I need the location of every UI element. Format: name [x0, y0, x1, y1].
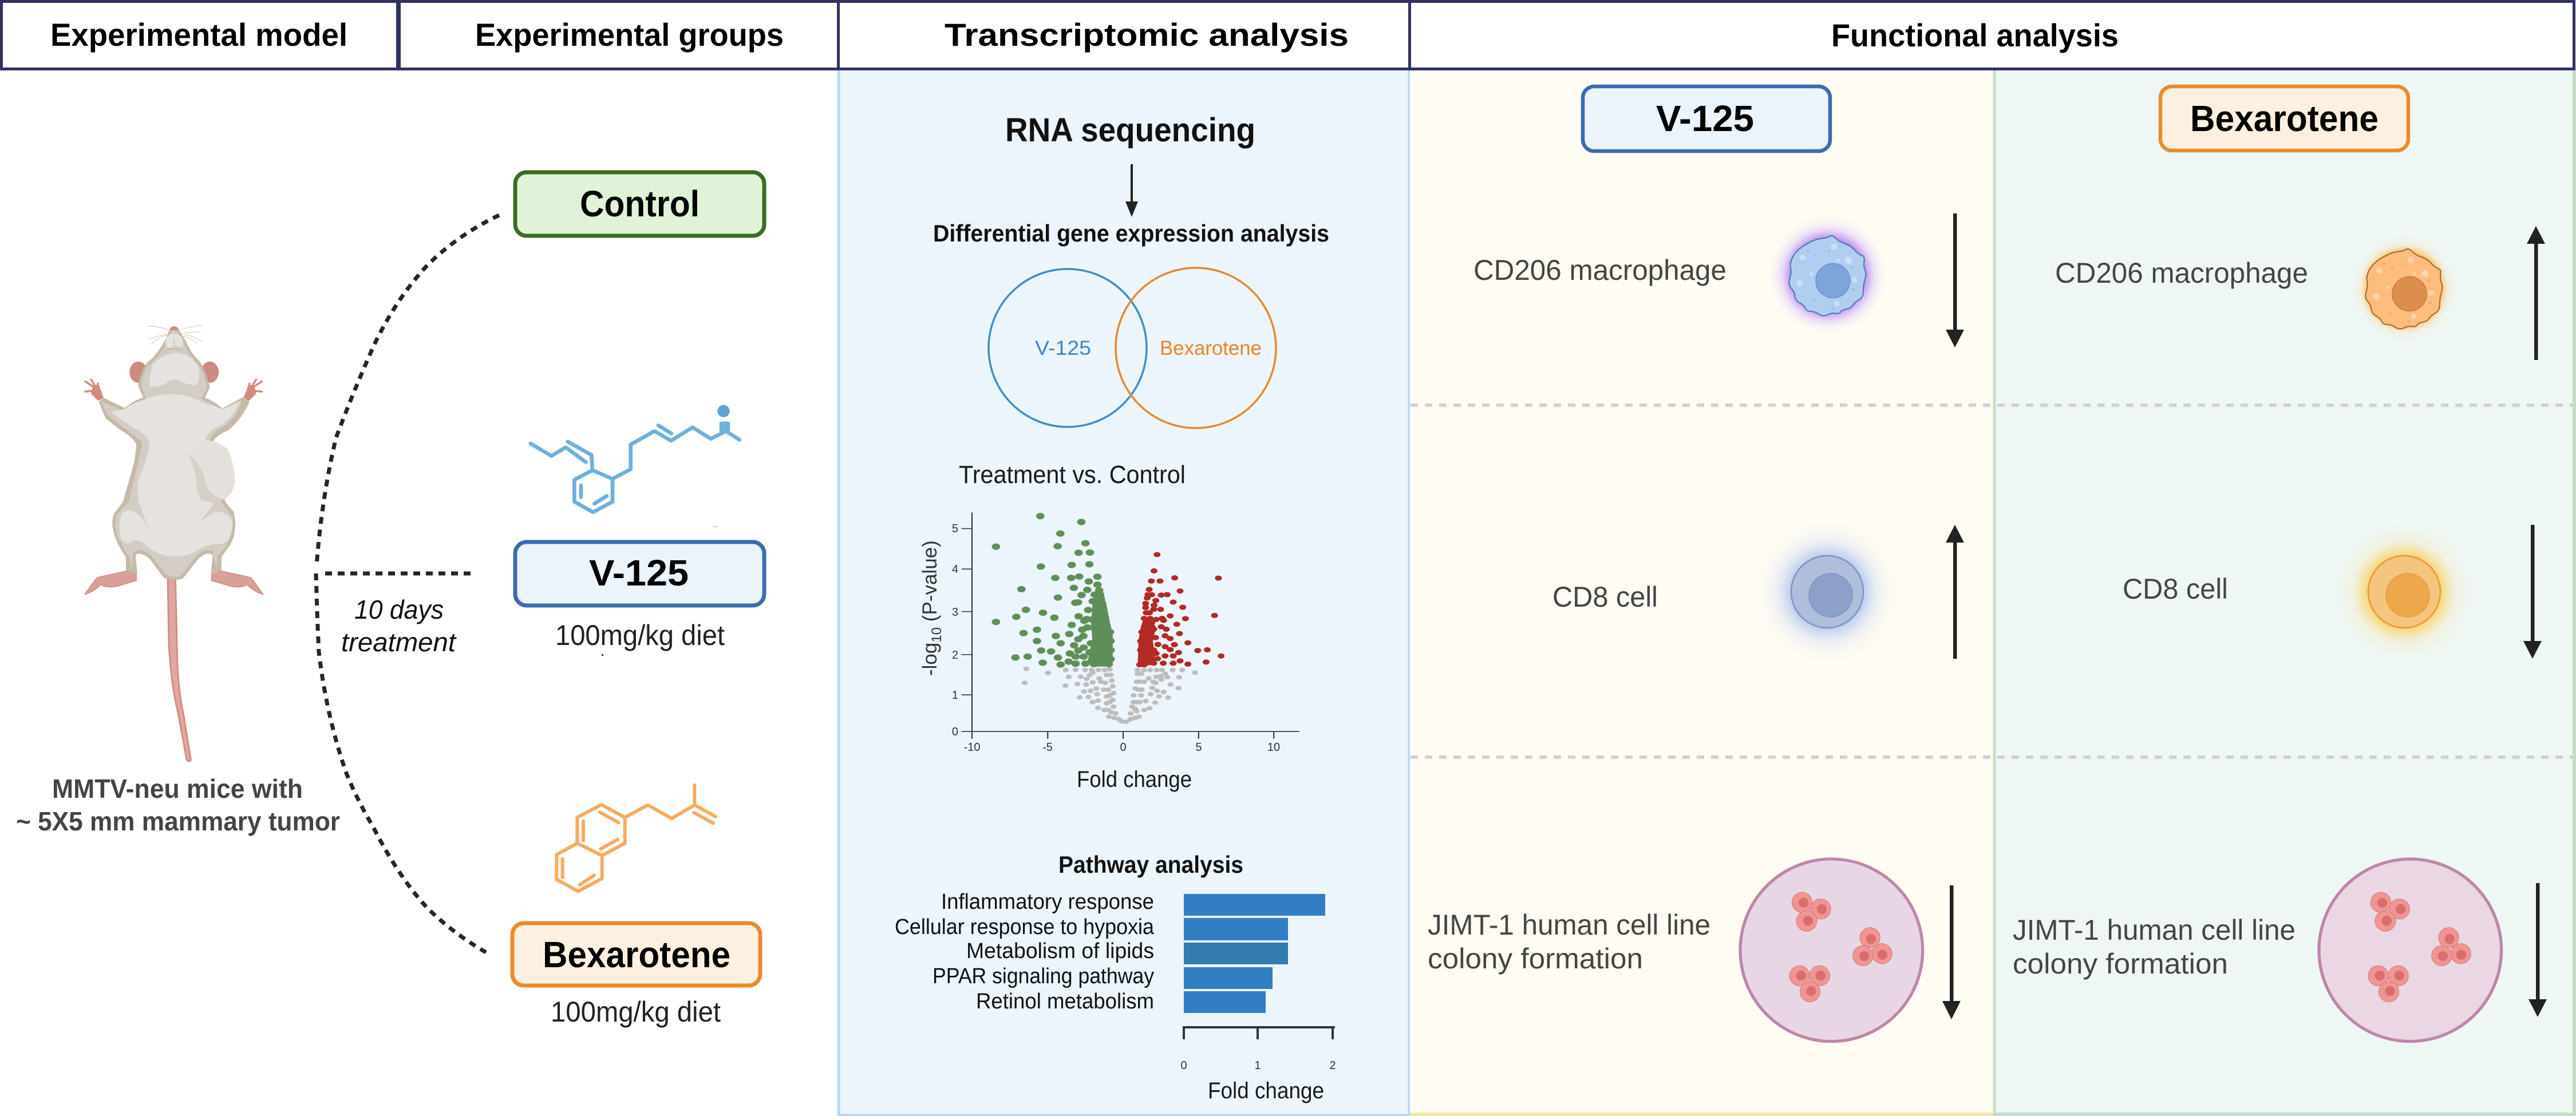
badge: V-125: V-125 — [1656, 98, 1754, 139]
header: experimental model — [1, 1, 397, 69]
arrow: up — [2527, 226, 2545, 360]
label: CD206 macrophage: CD206 macrophage — [1473, 254, 1726, 286]
badge: V-125 — [1583, 86, 1830, 151]
volcano plot: 3 — [952, 606, 958, 619]
label: JIMT-1 colony formation — [1428, 909, 1710, 975]
pathway bar chart: Metabolism of lipids — [966, 939, 1154, 963]
arrow: down — [1946, 213, 1964, 347]
venn diagram: Bexarotene — [1160, 337, 1262, 359]
icon: orange macrophage — [2349, 234, 2459, 343]
group: control — [515, 172, 764, 236]
venn diagram — [989, 268, 1276, 428]
volcano plot: 0 — [1120, 741, 1127, 754]
badge: Bexarotene — [2160, 86, 2408, 151]
pathway bar chart: PPAR signaling pathway — [933, 964, 1154, 988]
panel: transcriptomic analysis — [839, 69, 1409, 1115]
label: mouse model description: ~ 5X5 mm mammary tumor — [16, 806, 340, 836]
label: CD8 cell: CD8 cell — [2123, 573, 2228, 605]
volcano plot: 10 — [929, 627, 945, 643]
pathway bar chart: Cellular response to hypoxia — [895, 915, 1155, 939]
molecule: bexarotene structure — [556, 785, 716, 891]
volcano plot: -5 — [1042, 741, 1053, 754]
header: experimental groups: Experimental groups — [475, 17, 784, 53]
volcano plot: 2 — [952, 649, 958, 662]
volcano plot: -log — [919, 643, 941, 676]
label: JIMT-1 colony formation — [2013, 914, 2296, 980]
pathway bar chart: 1 — [1254, 1059, 1261, 1072]
label: 10 days treatment — [341, 595, 457, 657]
heading: RNA sequencing: RNA sequencing — [1005, 112, 1255, 149]
icon: colony formation dish — [1740, 859, 1923, 1042]
icon: orange CD8 cell — [2331, 519, 2478, 665]
volcano plot: 0 — [952, 726, 958, 738]
panel: functional analysis V-125 — [1410, 69, 1993, 1116]
arrow: RNA sequencing to differential expression — [1125, 164, 1138, 217]
volcano plot: 5 — [952, 523, 958, 535]
label: mouse model description: MMTV-neu mice with — [52, 774, 303, 804]
pathway bar chart: 0 — [1180, 1059, 1187, 1072]
label: JIMT-1 colony formation: colony formation — [2013, 948, 2228, 980]
label: CD8 cell: CD8 cell — [1552, 581, 1658, 613]
group: control: Control — [580, 183, 700, 224]
volcano plot: Fold change — [1077, 767, 1192, 792]
icon: purple macrophage — [1767, 214, 1889, 337]
icon: colony formation dish — [2319, 859, 2502, 1042]
volcano plot: 10 — [1267, 741, 1280, 754]
volcano plot: (P-value) — [919, 540, 941, 627]
group: V-125: V-125 — [589, 552, 689, 593]
pathway bar chart: Pathway analysis — [1058, 851, 1243, 878]
volcano plot: 5 — [1195, 741, 1202, 754]
label: JIMT-1 colony formation: JIMT-1 human cell line — [1428, 909, 1710, 941]
label: 10 days treatment: 10 days — [354, 595, 444, 624]
header: functional analysis: Functional analysis — [1831, 17, 2119, 53]
venn diagram: V-125 — [1035, 337, 1091, 359]
volcano plot — [919, 461, 1299, 792]
group: bexarotene: Bexarotene — [543, 934, 730, 975]
label: bexarotene dose: 100mg/kg diet — [551, 996, 721, 1028]
label: mouse model description — [16, 774, 340, 836]
label: 10 days treatment: treatment — [341, 627, 457, 657]
pathway bar chart: Fold change — [1208, 1078, 1324, 1103]
icon: blue CD8 cell — [1753, 517, 1902, 666]
group: V-125 — [515, 542, 764, 606]
header: experimental model: Experimental model — [50, 17, 347, 53]
group: bexarotene — [512, 923, 760, 986]
badge: Bexarotene: Bexarotene — [2190, 98, 2379, 139]
label: JIMT-1 colony formation: colony formation — [1428, 943, 1643, 975]
volcano plot: 4 — [952, 563, 958, 576]
pathway bar chart: Inflammatory response — [941, 890, 1154, 914]
label: CD206 macrophage: CD206 macrophage — [2055, 257, 2308, 289]
arrow: down — [1942, 885, 1961, 1019]
header: transcriptomic analysis: Transcriptomic analysis — [945, 17, 1349, 53]
header: experimental groups — [400, 1, 838, 69]
header: functional analysis — [1409, 1, 2574, 69]
heading: differential gene expression analysis: Differential gene expression analysis — [933, 220, 1329, 247]
arrow: up — [1946, 525, 1964, 659]
pathway bar chart: 2 — [1329, 1059, 1336, 1072]
arrow: down — [2528, 883, 2547, 1017]
volcano plot: -10 — [964, 741, 980, 754]
panel: functional analysis Bexarotene — [1993, 69, 2576, 1116]
molecule: V-125 structure — [531, 407, 740, 527]
arrow: dashed branches to groups — [316, 215, 499, 952]
arrow: down — [2523, 525, 2542, 659]
label: V-125 dose: 100mg/kg diet — [555, 619, 725, 651]
header: transcriptomic analysis — [838, 1, 1409, 69]
illustration: mouse with mammary tumor — [85, 325, 263, 761]
volcano plot: Treatment vs. Control — [959, 461, 1186, 489]
pathway bar chart — [895, 851, 1336, 1103]
label: JIMT-1 colony formation: JIMT-1 human cell line — [2013, 914, 2296, 946]
volcano plot: 1 — [952, 689, 958, 702]
pathway bar chart: Retinol metabolism — [976, 990, 1154, 1014]
